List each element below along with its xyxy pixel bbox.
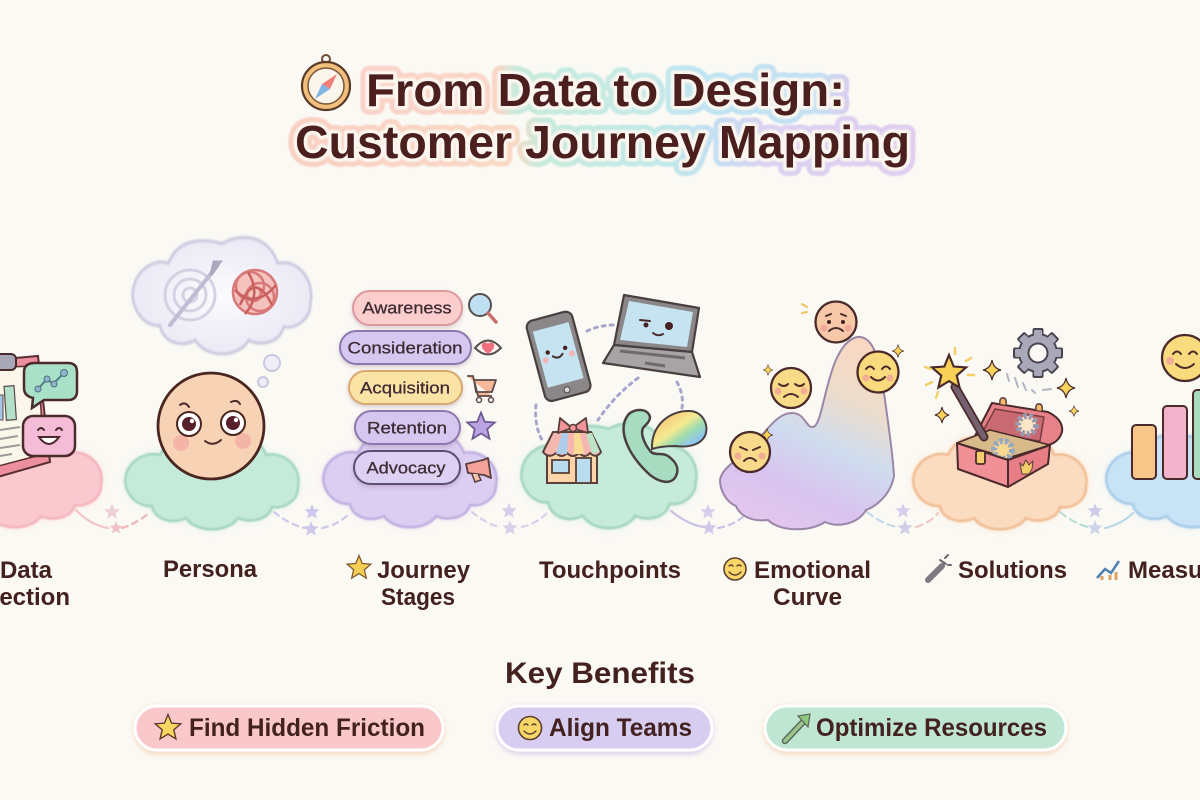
stage: consideration: Consideration [348,338,462,358]
icon: happy face [858,344,904,392]
panel: touchpoints [521,295,706,584]
label: journey stages [347,556,471,611]
panel: journey stages [323,291,501,611]
motion lines [1007,374,1051,393]
label: data collection [0,557,70,611]
icon: eye with heart [475,340,501,354]
icon: clipboard report [0,354,50,482]
label: data collection: Data [0,557,53,584]
arrow: touchpoints to curve [671,504,746,534]
icon: target with arrow [165,262,220,325]
arrow: persona to stages [274,504,350,535]
stage: advocacy: Advocacy [366,458,446,478]
bar chart [1132,390,1200,479]
icon: shopping cart [467,376,496,402]
icon: magic wand [925,348,984,437]
title text: From Data to Design: [366,64,845,116]
title glow [295,64,910,168]
icon: tangled scribble [233,270,277,314]
cloud: data collection [0,432,102,527]
title glow: From Data to Design: [366,64,845,116]
arrow: solutions to measurement [1060,503,1133,534]
icon: smiling message bubble [23,416,75,456]
label: emotional curve: Curve [773,584,842,611]
icon: chart speech bubble [24,363,77,408]
label: persona: Persona [163,556,258,583]
icon: magnifier [469,294,496,322]
title glow: Customer Journey Mapping [295,116,910,168]
benefit pill: optimize resources [763,705,1068,755]
label: emotional curve: Emotional [754,557,871,584]
icon: happy face [1162,335,1200,381]
title halo [295,64,910,168]
stage: advocacy [354,451,460,484]
icon: rainbow speech bubble [652,411,706,449]
dotted links between devices [536,325,682,440]
title text [295,64,910,168]
icon: sparkles [935,360,1079,423]
icon: shop with bow [543,418,601,483]
benefit pill: align teams [495,705,714,755]
benefit pill: find hidden friction: Find Hidden Friction [189,714,425,742]
cloud: solutions [913,434,1087,529]
panel: measurement [1097,335,1200,584]
heading: key benefits: Key Benefits [505,657,695,690]
label: emotional curve [724,557,871,611]
panel: emotional curve [720,302,904,611]
connectors between clouds [76,503,1133,535]
stage: retention [355,411,460,444]
arrow: curve to solutions [867,503,938,534]
label: journey stages: Journey [377,557,471,584]
label: measurement [1097,557,1200,584]
panel: persona [125,237,311,583]
panel: data collection [0,354,102,611]
icon: frowning face at peak [802,302,856,342]
cloud: touchpoints [521,423,696,528]
arrow: stages to touchpoints [472,503,547,534]
icon: telephone handset [624,410,677,482]
stage: acquisition: Acquisition [360,378,450,398]
title halo: From Data to Design: [366,64,845,116]
benefit pill: optimize resources: Optimize Resources [816,714,1047,742]
cloud: journey stages [323,432,497,527]
chart: emotional curve hill [720,337,894,529]
thought cloud [133,237,311,387]
icon: treasure chest open [957,398,1062,487]
icon: purple star [467,412,495,439]
icon: megaphone [466,458,491,482]
title text: Customer Journey Mapping [295,116,910,168]
benefit pill: find hidden friction [133,705,445,755]
label: journey stages: Stages [381,584,455,611]
icon: laptop [603,295,700,377]
stage: acquisition [349,371,462,404]
icon: compass [302,55,350,110]
title [295,55,910,168]
label: touchpoints: Touchpoints [539,557,681,584]
arrow: data to persona [76,504,148,534]
stage: consideration [340,331,471,364]
icon: smartphone [525,310,592,403]
cloud: measurement [1106,432,1200,527]
icon: sad face low [730,428,773,472]
panel: solutions [913,328,1087,584]
stage: awareness [353,291,462,325]
stage: awareness: Awareness [362,298,452,318]
title halo: Customer Journey Mapping [295,116,910,168]
icon: persona face [158,373,264,479]
benefit pill: align teams: Align Teams [549,714,692,742]
icon: gear [1013,328,1063,378]
stage: retention: Retention [367,418,447,438]
icon: tired face [763,364,811,408]
label: solutions: Solutions [958,557,1067,584]
cloud: persona [125,434,299,529]
